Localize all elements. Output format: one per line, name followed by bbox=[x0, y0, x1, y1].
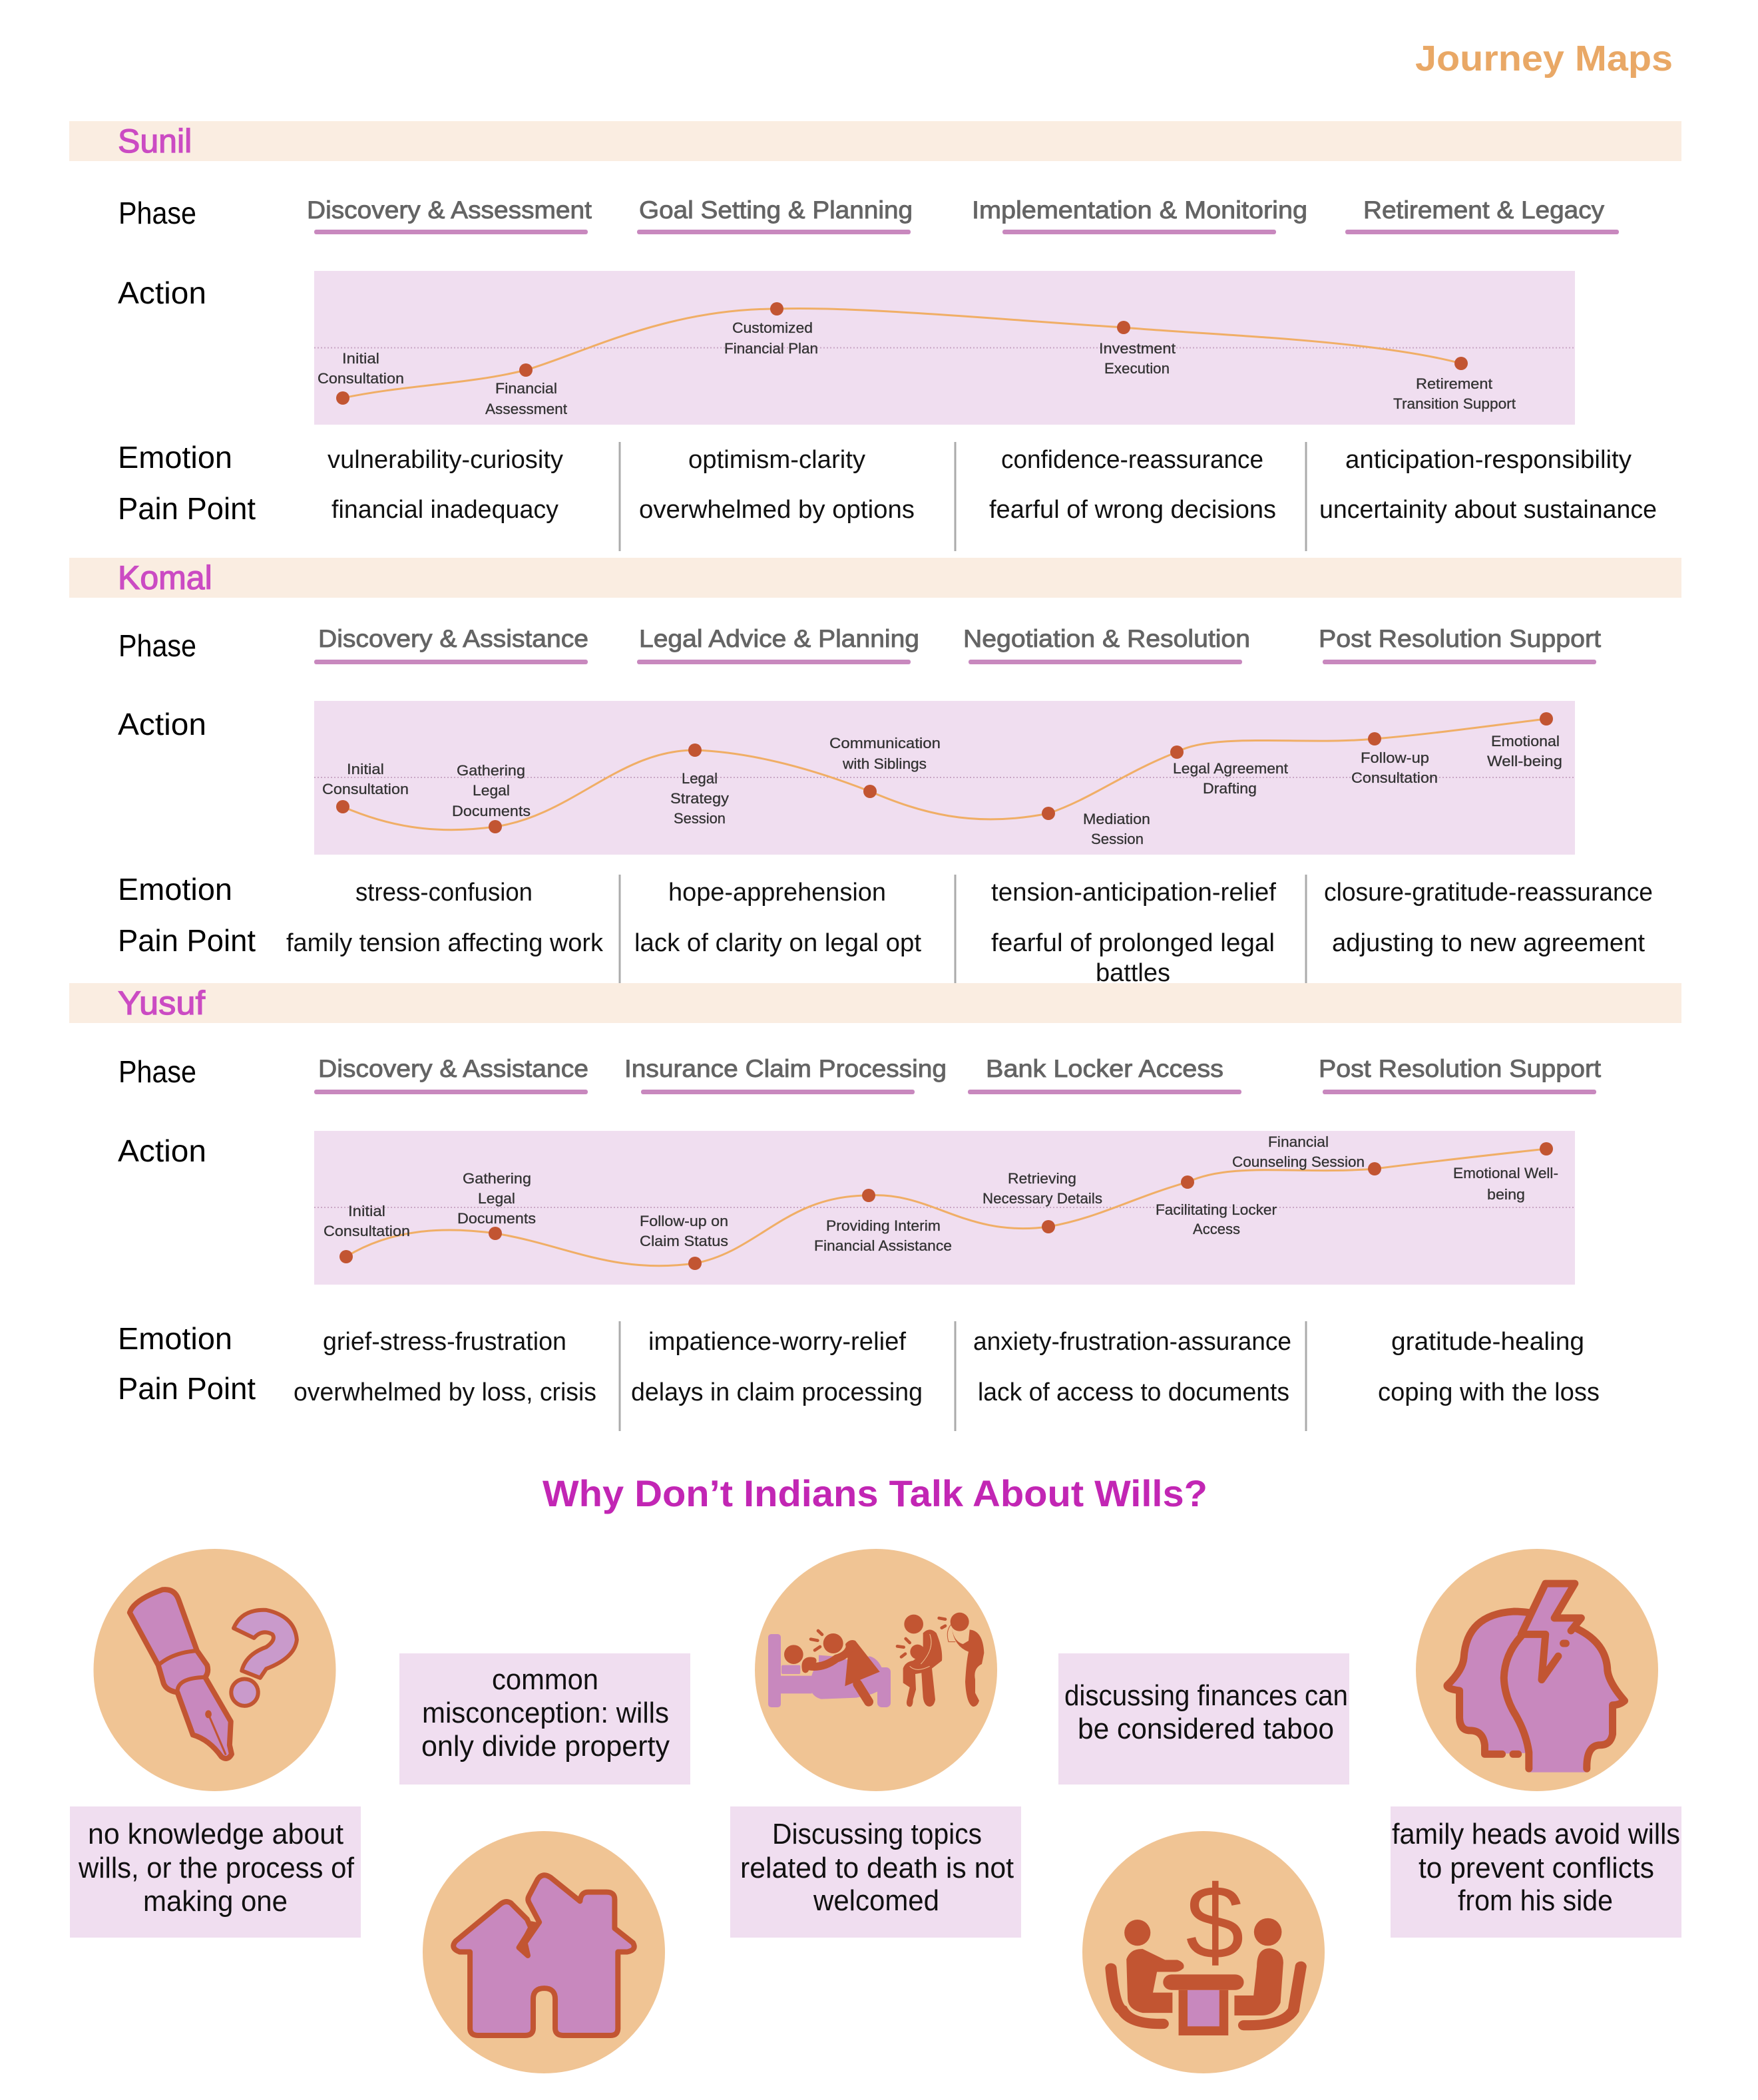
icon: grieving people at a bedside bbox=[755, 1549, 997, 1791]
action curve chart: Well-being bbox=[1487, 753, 1562, 769]
heading band: Yusuf: Yusuf bbox=[118, 984, 205, 1022]
action curve chart: Necessary Details bbox=[983, 1190, 1102, 1207]
emotion and pain point cells: tension-anticipation-relief bbox=[991, 879, 1276, 907]
action curve chart: Follow-up on bbox=[640, 1213, 728, 1229]
action curve chart: Follow-up bbox=[1361, 749, 1429, 766]
action curve chart: Claim Status bbox=[640, 1233, 728, 1249]
action curve chart: Financial Assistance bbox=[814, 1237, 952, 1254]
action curve chart: Initial bbox=[342, 350, 379, 367]
section heading: Why Don’t Indians Talk About Wills? bbox=[543, 1472, 1208, 1514]
row label: Phase: Phase bbox=[118, 196, 196, 230]
emotion and pain point cells: family tension affecting work bbox=[286, 929, 604, 957]
heading band: Yusuf bbox=[69, 983, 1681, 1023]
row label: Emotion: Emotion bbox=[118, 872, 232, 907]
phase headings with underlines: Implementation & Monitoring bbox=[972, 196, 1307, 224]
callout: topics related to death: related to death is not bbox=[740, 1852, 1014, 1884]
action curve chart: Legal bbox=[682, 770, 718, 787]
phase headings with underlines bbox=[314, 1055, 1602, 1094]
action curve chart: Financial bbox=[1268, 1134, 1329, 1150]
phase headings with underlines: Insurance Claim Processing bbox=[624, 1055, 947, 1082]
phase headings with underlines: Legal Advice & Planning bbox=[639, 625, 919, 652]
callout: no knowledge: wills, or the process of bbox=[78, 1852, 355, 1884]
action curve chart: Gathering bbox=[457, 762, 525, 779]
emotion and pain point cells: gratitude-healing bbox=[1391, 1328, 1584, 1356]
heading band: Sunil bbox=[69, 121, 1681, 161]
action curve chart: Initial bbox=[348, 1203, 385, 1219]
action curve chart: Mediation bbox=[1083, 811, 1150, 827]
phase headings with underlines: Discovery & Assistance bbox=[318, 1055, 588, 1082]
callout: finances taboo: be considered taboo bbox=[1078, 1713, 1334, 1745]
emotion and pain point cells: delays in claim processing bbox=[631, 1378, 923, 1406]
action curve chart: Session bbox=[1091, 831, 1144, 847]
action curve chart: Consultation bbox=[318, 370, 404, 387]
action curve chart: Legal Agreement bbox=[1173, 760, 1288, 777]
emotion and pain point cells bbox=[286, 875, 1653, 987]
action curve chart: Session bbox=[674, 810, 726, 827]
action curve chart: Transition Support bbox=[1393, 395, 1516, 412]
phase headings with underlines: Goal Setting & Planning bbox=[639, 196, 913, 224]
emotion and pain point cells: grief-stress-frustration bbox=[323, 1328, 566, 1356]
callout: family heads avoid wills: to prevent conflicts bbox=[1419, 1852, 1654, 1884]
row label: Pain Point: Pain Point bbox=[118, 491, 256, 526]
action curve chart: Financial bbox=[495, 380, 557, 397]
action curve chart bbox=[314, 271, 1575, 425]
action curve chart: Emotional Well- bbox=[1453, 1165, 1558, 1181]
action curve chart: Communication bbox=[829, 735, 941, 751]
emotion and pain point cells: optimism-clarity bbox=[688, 446, 865, 474]
icon: two heads with lightning bolt bbox=[1416, 1549, 1658, 1791]
icon: two people discussing money: $ bbox=[1186, 1864, 1244, 1981]
action curve chart: Legal bbox=[473, 782, 510, 799]
action curve chart: Access bbox=[1193, 1221, 1240, 1237]
action curve chart: Counseling Session bbox=[1232, 1154, 1365, 1170]
emotion and pain point cells: lack of clarity on legal opt bbox=[634, 929, 921, 957]
callout: common misconception: misconception: wills bbox=[422, 1697, 669, 1729]
action curve chart: Customized bbox=[732, 319, 813, 336]
row label: Emotion: Emotion bbox=[118, 440, 232, 475]
row label: Action: Action bbox=[118, 707, 206, 741]
emotion and pain point cells: adjusting to new agreement bbox=[1332, 929, 1645, 957]
row label: Action: Action bbox=[118, 276, 206, 310]
emotion and pain point cells: lack of access to documents bbox=[978, 1378, 1289, 1406]
emotion and pain point cells: vulnerability-curiosity bbox=[328, 446, 563, 474]
phase headings with underlines bbox=[307, 196, 1619, 234]
phase headings with underlines bbox=[314, 625, 1602, 664]
callout: finances taboo bbox=[1058, 1653, 1349, 1785]
callout: topics related to death: Discussing topics bbox=[772, 1818, 982, 1850]
emotion and pain point cells bbox=[328, 442, 1657, 551]
row label: Phase: Phase bbox=[118, 1054, 196, 1089]
action curve chart: Documents bbox=[457, 1210, 536, 1227]
emotion and pain point cells: coping with the loss bbox=[1378, 1378, 1600, 1406]
phase headings with underlines: Post Resolution Support bbox=[1319, 625, 1602, 652]
phase headings with underlines: Discovery & Assessment bbox=[307, 196, 592, 224]
emotion and pain point cells: hope-apprehension bbox=[668, 879, 886, 907]
callout: family heads avoid wills bbox=[1391, 1806, 1681, 1938]
action curve chart: Legal bbox=[478, 1190, 515, 1207]
callout: no knowledge: no knowledge about bbox=[88, 1818, 343, 1850]
action curve chart: Emotional bbox=[1491, 733, 1560, 749]
callout: no knowledge: making one bbox=[143, 1885, 288, 1918]
action curve chart: Retrieving bbox=[1008, 1170, 1076, 1187]
callout: common misconception: common bbox=[492, 1663, 598, 1696]
panel: Yusuf journey bbox=[69, 983, 1681, 1431]
emotion and pain point cells: confidence-reassurance bbox=[1001, 446, 1263, 474]
emotion and pain point cells: overwhelmed by options bbox=[639, 496, 915, 524]
emotion and pain point cells: fearful of wrong decisions bbox=[989, 496, 1276, 524]
action curve chart: Retirement bbox=[1416, 375, 1492, 392]
emotion and pain point cells: fearful of prolonged legal bbox=[991, 929, 1275, 957]
emotion and pain point cells: closure-gratitude-reassurance bbox=[1324, 879, 1653, 907]
icon: fountain pen and question mark bbox=[93, 1549, 335, 1791]
phase headings with underlines: Discovery & Assistance bbox=[318, 625, 588, 652]
action curve chart: Consultation bbox=[324, 1223, 410, 1239]
emotion and pain point cells: anxiety-frustration-assurance bbox=[973, 1328, 1291, 1356]
callout: finances taboo: discussing finances can bbox=[1064, 1679, 1348, 1712]
heading band: Sunil: Sunil bbox=[118, 122, 192, 160]
row label: Action: Action bbox=[118, 1134, 206, 1168]
action curve chart: being bbox=[1487, 1186, 1525, 1203]
emotion and pain point cells: financial inadequacy bbox=[331, 496, 558, 524]
panel: Sunil journey bbox=[69, 121, 1681, 551]
action curve chart: Assessment bbox=[485, 401, 567, 417]
callout: family heads avoid wills: from his side bbox=[1458, 1884, 1613, 1917]
action curve chart: with Siblings bbox=[842, 755, 927, 772]
emotion and pain point cells: battles bbox=[1096, 959, 1170, 987]
action curve chart bbox=[314, 1131, 1575, 1285]
action curve chart: Facilitating Locker bbox=[1156, 1201, 1277, 1218]
panel: Komal journey bbox=[69, 558, 1681, 987]
action curve chart: Consultation bbox=[322, 781, 409, 797]
row label: Phase: Phase bbox=[118, 628, 196, 663]
action curve chart: Gathering bbox=[463, 1170, 531, 1187]
phase headings with underlines: Retirement & Legacy bbox=[1363, 196, 1605, 224]
phase headings with underlines: Bank Locker Access bbox=[986, 1055, 1223, 1082]
emotion and pain point cells bbox=[294, 1321, 1600, 1431]
phase headings with underlines: Negotiation & Resolution bbox=[963, 625, 1250, 652]
action curve chart: Strategy bbox=[670, 790, 729, 807]
callout: common misconception: only divide property bbox=[421, 1730, 670, 1763]
action curve chart: Providing Interim bbox=[826, 1217, 941, 1234]
phase headings with underlines: Post Resolution Support bbox=[1319, 1055, 1602, 1082]
emotion and pain point cells: stress-confusion bbox=[355, 879, 533, 907]
action curve chart: Consultation bbox=[1351, 769, 1438, 786]
callout: common misconception bbox=[399, 1653, 690, 1785]
emotion and pain point cells: overwhelmed by loss, crisis bbox=[294, 1378, 596, 1406]
action curve chart: Execution bbox=[1104, 360, 1170, 377]
icon: broken house bbox=[423, 1831, 665, 2073]
callout: topics related to death bbox=[730, 1806, 1021, 1938]
callout: no knowledge bbox=[70, 1806, 361, 1938]
action curve chart: Initial bbox=[347, 761, 384, 777]
row label: Emotion: Emotion bbox=[118, 1321, 232, 1356]
callout: topics related to death: welcomed bbox=[813, 1884, 939, 1917]
action curve chart: Investment bbox=[1099, 340, 1176, 357]
callout: family heads avoid wills: family heads avoid wills bbox=[1392, 1818, 1680, 1850]
title: Journey Maps bbox=[1415, 39, 1673, 79]
action curve chart: Documents bbox=[452, 803, 531, 819]
emotion and pain point cells: impatience-worry-relief bbox=[648, 1328, 906, 1356]
action curve chart bbox=[314, 701, 1575, 855]
row label: Pain Point: Pain Point bbox=[118, 923, 256, 958]
action curve chart: Drafting bbox=[1203, 780, 1257, 797]
heading band: Komal bbox=[69, 558, 1681, 598]
emotion and pain point cells: uncertainity about sustainance bbox=[1319, 496, 1657, 524]
emotion and pain point cells: anticipation-responsibility bbox=[1345, 446, 1632, 474]
heading band: Komal: Komal bbox=[118, 559, 212, 596]
icon: two people discussing money bbox=[1082, 1831, 1325, 2073]
row label: Pain Point: Pain Point bbox=[118, 1371, 256, 1406]
action curve chart: Financial Plan bbox=[724, 340, 818, 357]
